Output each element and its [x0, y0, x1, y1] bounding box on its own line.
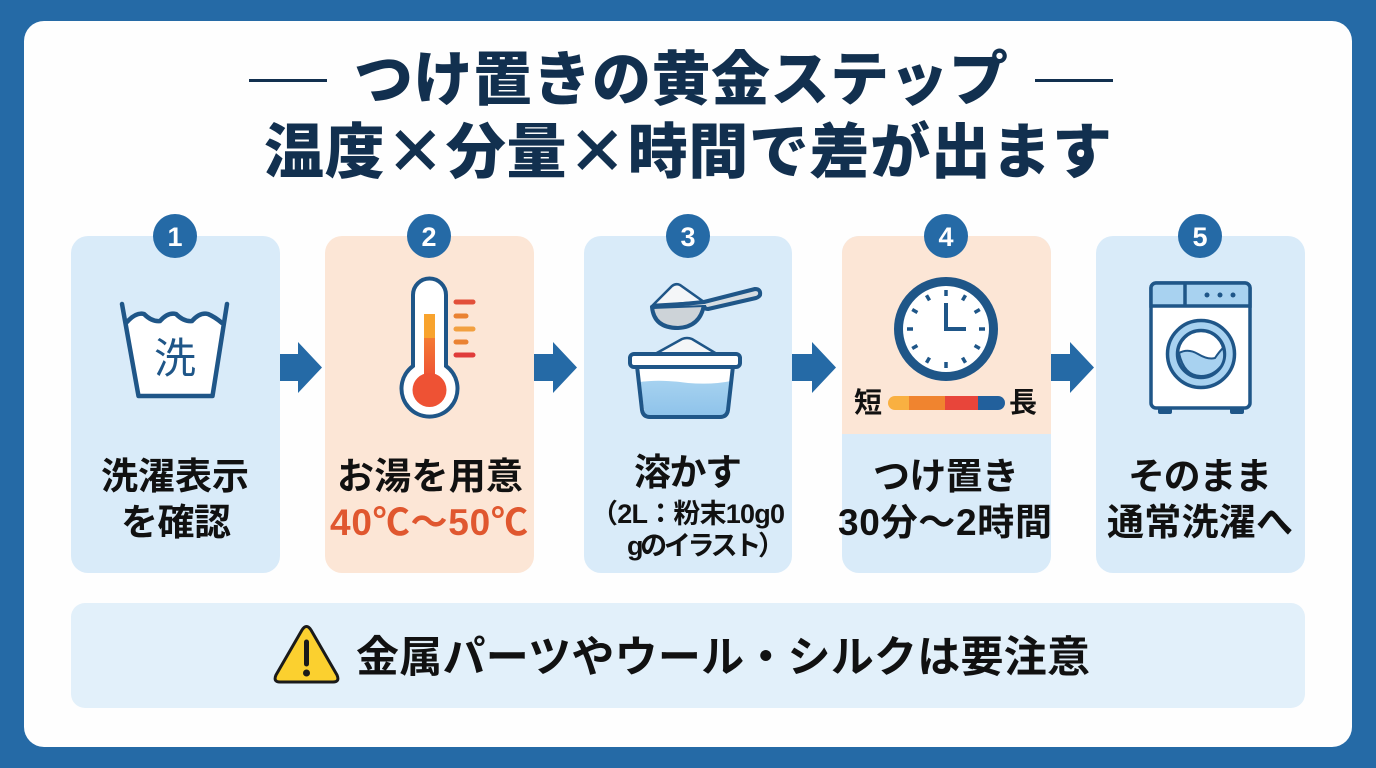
icon: thermometer — [402, 278, 473, 417]
icon: washing machine — [1151, 283, 1250, 414]
time bar: 短 — [854, 387, 882, 418]
icon: clock — [898, 282, 994, 376]
step 2 badge — [407, 214, 451, 258]
icon: wash tub: 洗 — [154, 335, 196, 382]
step 1 label: 洗濯表示 — [101, 456, 249, 497]
step 3 label: 溶かす — [634, 452, 742, 493]
arrow 4 — [1051, 342, 1094, 393]
icon: warning triangle — [275, 626, 338, 682]
step 2 label: お湯を用意 — [337, 456, 523, 497]
step 4 card — [838, 214, 1052, 573]
step 5 label: 通常洗濯へ — [1107, 502, 1293, 543]
arrow 2 — [534, 342, 577, 393]
step 4 label — [838, 456, 1052, 543]
step 2 badge: 2 — [421, 222, 437, 252]
step 5 card — [1096, 214, 1305, 573]
time bar: 長 — [1009, 387, 1037, 418]
step 3 label: （2L：粉末10g0 — [591, 499, 785, 529]
arrow 1 — [280, 342, 322, 393]
step 2 card — [325, 214, 534, 573]
step 3 label: gのイラスト） — [627, 531, 785, 561]
step 4 label: つけ置き — [873, 456, 1019, 497]
step 3 card — [584, 214, 792, 573]
warning band — [71, 603, 1305, 708]
step 3 label — [591, 452, 785, 561]
step 2 label — [330, 456, 528, 543]
step 5 label — [1107, 456, 1293, 543]
step 5 badge: 5 — [1192, 222, 1208, 252]
title — [249, 32, 1113, 191]
step 4 label: 30分～2時間 — [838, 502, 1052, 543]
icon: scoop and tub — [630, 284, 760, 417]
step 3 badge — [666, 214, 710, 258]
warning text: 金属パーツやウール・シルクは要注意 — [356, 634, 1090, 682]
step 4 badge: 4 — [938, 222, 954, 252]
step 5 label: そのまま — [1128, 456, 1272, 497]
step 5 badge — [1178, 214, 1222, 258]
time bar — [854, 387, 1037, 418]
step 1 badge — [153, 214, 197, 258]
step 4 badge — [924, 214, 968, 258]
title: 温度×分量×時間で差が出ます — [264, 104, 1112, 191]
step 3 badge: 3 — [680, 222, 696, 252]
step 1 label — [101, 456, 249, 543]
icon: wash tub — [122, 304, 227, 396]
step 1 card — [71, 214, 280, 573]
title: つけ置きの黄金ステップ — [354, 32, 1008, 117]
step 1 badge: 1 — [167, 222, 183, 252]
step 1 label: を確認 — [121, 502, 231, 543]
arrow 3 — [792, 342, 836, 393]
step 2 label: 40℃～50℃ — [330, 502, 528, 543]
